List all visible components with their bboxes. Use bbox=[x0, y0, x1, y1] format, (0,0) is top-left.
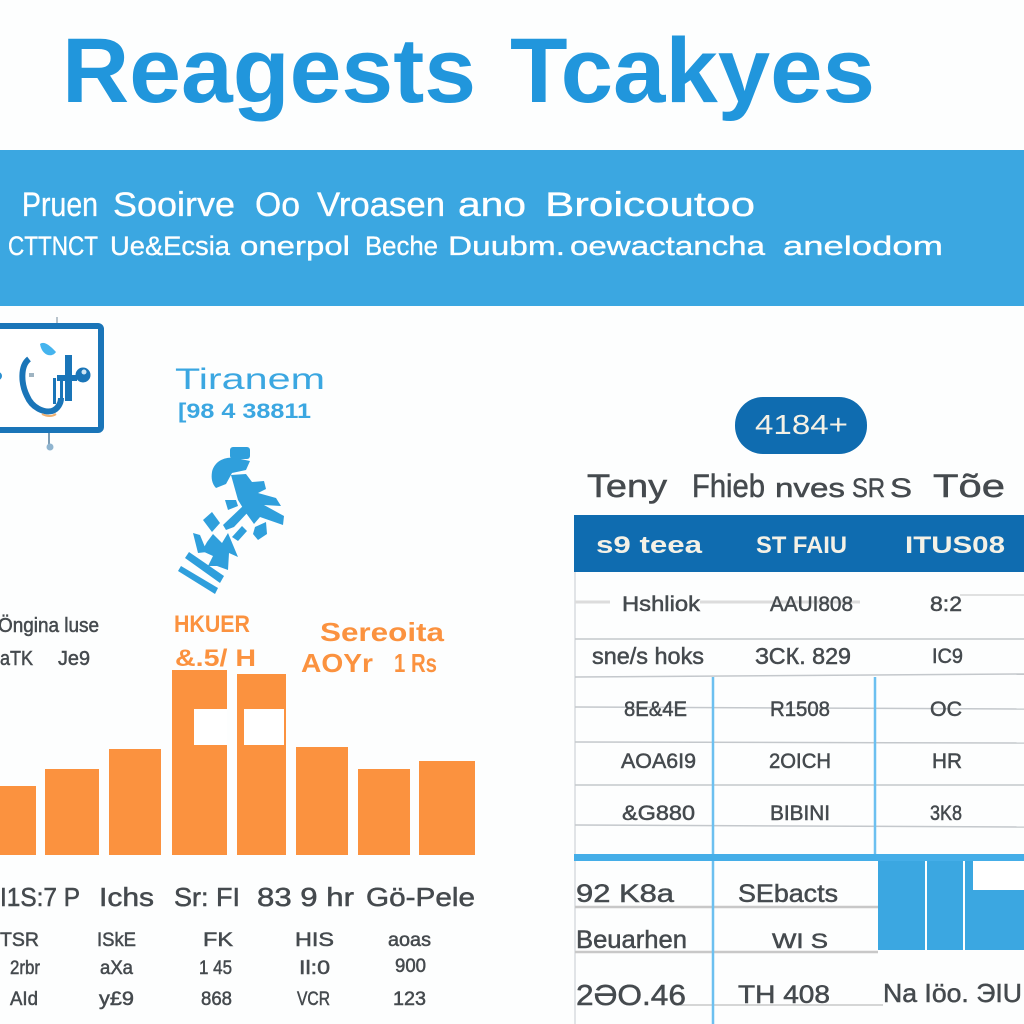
table body text: IC9 bbox=[932, 645, 963, 668]
chart axis labels: I1S:7 P bbox=[0, 882, 80, 912]
chart side labels bbox=[0, 615, 99, 670]
band text line 1: Pruen bbox=[22, 186, 98, 224]
orange callout: seasons: Sereoita bbox=[320, 617, 445, 647]
band text line 2: onerpol bbox=[240, 231, 350, 261]
orange callout: seasons: AOYr bbox=[301, 648, 373, 678]
band text line 2: anelodom bbox=[783, 231, 943, 261]
table body text: 2OICH bbox=[769, 750, 831, 773]
chart side labels: aTK bbox=[0, 648, 34, 670]
table heading: nves bbox=[775, 473, 845, 503]
band text line 2: Beche bbox=[365, 231, 438, 261]
chart data rows: 900 bbox=[395, 956, 426, 977]
chart data rows: 123 bbox=[393, 989, 426, 1010]
chart data rows bbox=[0, 930, 431, 1010]
table heading: Fhieb bbox=[692, 468, 765, 504]
table bbox=[574, 515, 1024, 1024]
title bbox=[62, 20, 875, 122]
pill badge: 4184+ bbox=[755, 409, 848, 440]
chart axis labels: Gö-Pele bbox=[366, 882, 475, 912]
chart data rows: VCR bbox=[297, 989, 330, 1010]
band text line 1: Sooirve bbox=[113, 186, 235, 224]
orange callout: bars: &.5/ H bbox=[175, 645, 256, 672]
band text line 1: Broicoutoo bbox=[545, 186, 755, 224]
panel: blue intro band bbox=[0, 150, 1024, 306]
table footer text bbox=[576, 880, 1022, 1012]
orange callout: bars: HKUER bbox=[174, 611, 250, 638]
band text line 2: Ue&Ecsia bbox=[110, 231, 231, 261]
table footer text: WI S bbox=[772, 930, 828, 953]
chart data rows: Il:0 bbox=[299, 958, 330, 979]
table body text: ЗСК. 829 bbox=[755, 643, 851, 669]
table body text: OC bbox=[930, 698, 962, 721]
band text line 2: CTTNCT bbox=[8, 231, 98, 261]
table body text: R1508 bbox=[770, 698, 830, 721]
title: Tcakyes bbox=[510, 20, 875, 122]
table header row: s9 teea bbox=[596, 532, 703, 559]
table body text: Hshliok bbox=[622, 593, 701, 616]
table footer text: SEbacts bbox=[738, 880, 838, 908]
chart data rows: FK bbox=[203, 930, 233, 951]
table footer text: 2ƏO.46 bbox=[576, 980, 686, 1012]
chart side labels: Öngina luse bbox=[0, 615, 99, 637]
table heading: Tõe bbox=[933, 468, 1005, 504]
orange callout: seasons bbox=[301, 617, 445, 678]
table header row: ITUS08 bbox=[905, 532, 1005, 559]
icon: satellite bbox=[178, 447, 284, 594]
table body text: AAUI808 bbox=[770, 593, 853, 616]
band text line 2: oewactancha bbox=[570, 231, 766, 261]
chart axis labels bbox=[0, 882, 475, 912]
band text line 2: Duubm. bbox=[448, 231, 565, 261]
table heading bbox=[587, 468, 1005, 504]
pill badge bbox=[735, 397, 867, 454]
table heading: SR bbox=[852, 473, 885, 503]
heading: Tiranem: Tiranem bbox=[175, 363, 325, 396]
table header row: ST FAIU bbox=[756, 532, 847, 559]
band text line 1: Vroasen bbox=[317, 186, 445, 224]
table body text bbox=[592, 593, 963, 825]
table heading: S bbox=[890, 473, 912, 503]
bar chart bbox=[0, 670, 475, 855]
orange callout: seasons: 1 Rs bbox=[394, 648, 437, 678]
heading: Tiranem: [98 4 38811 bbox=[178, 400, 311, 423]
blue divider band bbox=[574, 854, 1024, 861]
table footer text: TH 408 bbox=[738, 981, 830, 1009]
chart data rows: ISkE bbox=[97, 930, 136, 951]
table body text: sne/s hoks bbox=[592, 643, 704, 669]
table footer text: 92 K8a bbox=[576, 880, 674, 908]
table body text: 8:2 bbox=[930, 593, 962, 616]
chart axis labels: 83 9 hr bbox=[257, 882, 354, 912]
band text line 1: Oo bbox=[255, 186, 300, 224]
heading: Tiranem bbox=[175, 363, 325, 423]
chart data rows: 2rbr bbox=[10, 958, 41, 979]
table body text: &G880 bbox=[622, 802, 695, 825]
table body text: BIBINI bbox=[770, 802, 830, 825]
band text line 2 bbox=[8, 231, 943, 261]
icon: framed gauge bbox=[0, 317, 101, 450]
band text line 1: ano bbox=[458, 186, 526, 224]
table header row bbox=[574, 515, 1024, 572]
table footer text: Na Iöo. ЭIU bbox=[883, 978, 1022, 1008]
chart data rows: AId bbox=[10, 989, 38, 1010]
chart data rows: aXa bbox=[100, 958, 133, 979]
chart data rows: aoas bbox=[388, 930, 431, 951]
table body text: AOA6I9 bbox=[621, 750, 696, 773]
chart axis labels: Sr: FI bbox=[174, 882, 240, 912]
band text line 1 bbox=[22, 186, 755, 224]
orange callout: bars bbox=[174, 611, 256, 672]
chart side labels: Je9 bbox=[58, 648, 90, 670]
table footer text: Beuarhen bbox=[576, 926, 687, 954]
table grid lines bbox=[575, 572, 1024, 1024]
chart data rows: 868 bbox=[201, 989, 232, 1010]
chart axis labels: Ichs bbox=[99, 882, 154, 912]
title: Reagests bbox=[62, 20, 476, 122]
table body text: 3K8 bbox=[930, 802, 962, 825]
chart data rows: HIS bbox=[295, 930, 334, 951]
table heading: Teny bbox=[587, 468, 667, 504]
table body text: 8E&4E bbox=[624, 698, 687, 721]
chart data rows: TSR bbox=[0, 930, 39, 951]
chart data rows: 1 45 bbox=[199, 958, 232, 979]
chart data rows: y£9 bbox=[99, 989, 134, 1010]
blue stacked block bbox=[878, 861, 1024, 950]
table body text: HR bbox=[932, 750, 962, 773]
